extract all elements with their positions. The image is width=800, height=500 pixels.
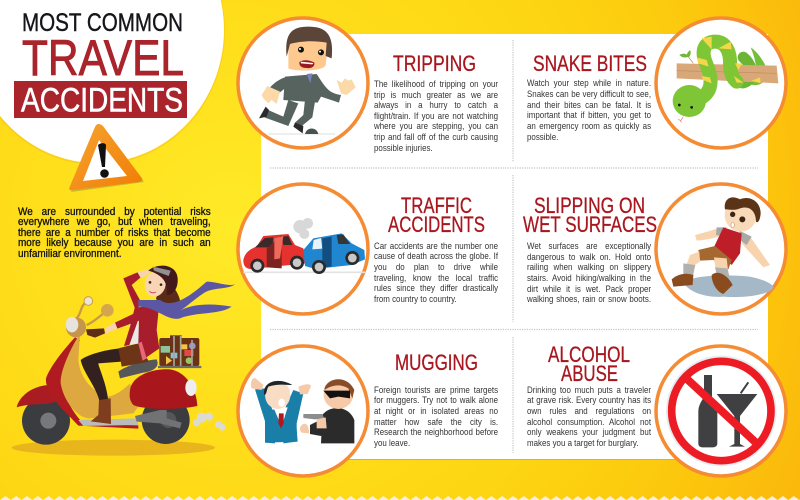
body: slipping on wet surfaces: walking shoes, rain or snow boots. xyxy=(527,294,651,305)
body: mugging: for muggers. Try not to walk alone xyxy=(374,395,498,406)
body: tripping: trip and fall off of the curb causing xyxy=(374,132,498,143)
body: slipping on wet surfaces: dirt while it is wet. Pack proper xyxy=(527,284,651,295)
heading: mugging: MUGGING xyxy=(395,350,478,375)
heading: alcohol abuse xyxy=(548,342,630,386)
body: alcohol abuse: Drinking too much puts a traveler xyxy=(527,385,651,396)
panel: traffic accidents xyxy=(238,184,498,314)
body: snake bites: possible. xyxy=(527,132,558,143)
heading: slipping on wet surfaces: WET SURFACES xyxy=(523,212,657,237)
icon: crashed cars xyxy=(238,184,368,314)
heading: slipping on wet surfaces: SLIPPING ON xyxy=(534,193,645,218)
body: alcohol abuse: only weakens your judgment but xyxy=(527,427,651,438)
intro text: We are surrounded by potential risks xyxy=(18,206,211,218)
body: tripping: possible injuries. xyxy=(374,143,433,154)
intro text xyxy=(18,206,211,260)
body: mugging xyxy=(374,384,498,449)
body: tripping: flight/train. If you are not watching xyxy=(374,111,498,122)
exhaust smoke xyxy=(193,413,226,431)
heading: snake bites: SNAKE BITES xyxy=(533,51,647,76)
body: traffic accidents: from country to country. xyxy=(374,294,457,305)
suitcase xyxy=(158,335,201,367)
body: tripping: where you are stepping, you can xyxy=(374,121,498,132)
body: mugging: you leave. xyxy=(374,438,410,449)
icon: warning triangle xyxy=(69,124,144,192)
body: slipping on wet surfaces: dangerous to walk on. Hold onto xyxy=(527,252,651,263)
title line: travel: TRAVEL xyxy=(22,30,184,86)
heading: alcohol abuse: ALCOHOL xyxy=(548,342,630,367)
body: slipping on wet surfaces: railing when walking on slippery xyxy=(527,262,651,273)
body: traffic accidents: cause of death across the globe. If xyxy=(374,251,498,262)
body: mugging: matter how safe the city is. xyxy=(374,417,498,428)
intro text: there are a number of risks that become xyxy=(18,227,211,239)
heading: alcohol abuse: ABUSE xyxy=(561,361,618,386)
body: tripping xyxy=(374,78,498,153)
intro text: unfamiliar environment. xyxy=(18,248,122,260)
body: tripping: The likelihood of tripping on your xyxy=(374,79,498,90)
icon: no alcohol sign xyxy=(656,346,786,476)
body: slipping on wet surfaces: stairs. Avoid hiking/walking in the xyxy=(527,273,651,284)
rider xyxy=(81,266,235,424)
body: snake bites: and their bites can be fatal. It is xyxy=(527,100,651,111)
body: alcohol abuse: at grave risk. Every country has its xyxy=(527,395,651,406)
panel: mugging xyxy=(238,346,498,476)
intro text: more likely because you are in such an xyxy=(18,237,211,249)
heading: traffic accidents: TRAFFIC xyxy=(401,193,472,218)
heading: tripping: TRIPPING xyxy=(393,51,476,76)
body: snake bites: Watch your step while in nature. xyxy=(527,78,651,89)
body: tripping: trip is much greater as we are xyxy=(374,90,498,100)
body: alcohol abuse xyxy=(527,384,651,449)
icon: mugger and victim xyxy=(238,346,368,476)
title line: most common: MOST COMMON xyxy=(22,9,183,37)
body: traffic accidents: Car accidents are the number one xyxy=(374,241,498,252)
heading: slipping on wet surfaces xyxy=(523,193,657,237)
rear wheel xyxy=(142,396,190,444)
illustration: woman on scooter xyxy=(12,266,235,456)
body: tripping: always in a hurry to catch a xyxy=(374,100,498,111)
scooter body xyxy=(17,333,197,429)
icon: tripping man xyxy=(238,18,368,148)
heading: traffic accidents: ACCIDENTS xyxy=(388,212,485,237)
heading: traffic accidents xyxy=(388,193,485,237)
body: snake bites: an emergency room as quickly as xyxy=(527,121,651,132)
zigzag bottom edge xyxy=(0,496,800,500)
panel: snake bites xyxy=(527,18,786,148)
icon: snake on branch xyxy=(656,18,786,148)
title banner: accidents: ACCIDENTS xyxy=(21,82,183,120)
body: traffic accidents xyxy=(374,240,498,305)
title white circle xyxy=(0,0,224,163)
title block xyxy=(0,0,225,165)
body: snake bites xyxy=(527,78,651,143)
panel: alcohol abuse xyxy=(527,342,786,476)
body: snake bites: Snakes can be very difficult to see, xyxy=(527,89,651,100)
body: traffic accidents: traveling, know the local traffic xyxy=(374,273,498,284)
front wheel xyxy=(22,397,70,445)
body: alcohol abuse: makes you a target for burglary. xyxy=(527,438,638,449)
body: snake bites: important that if bitten, you get to xyxy=(527,110,651,121)
panel: tripping xyxy=(238,18,498,153)
title circle shadow xyxy=(0,0,225,165)
icon: slipping boy xyxy=(656,184,786,314)
white content panel xyxy=(261,34,768,460)
body: traffic accidents: rules since they differ drastically xyxy=(374,283,498,294)
intro text: everywhere we go, but when traveling, xyxy=(18,216,211,228)
panel: slipping on wet surfaces xyxy=(523,184,786,314)
body: slipping on wet surfaces: Wet surfaces are exceptionally xyxy=(527,241,651,252)
body: mugging: Foreign tourists are prime targets xyxy=(374,385,498,396)
scooter shadow xyxy=(12,440,215,456)
body: slipping on wet surfaces xyxy=(527,241,651,306)
body: traffic accidents: you do plan to drive while xyxy=(374,262,498,273)
body: alcohol abuse: alcohol consumption. Alcohol not xyxy=(527,417,651,428)
body: alcohol abuse: own rules and regulations on xyxy=(527,406,651,417)
handlebars and headlight xyxy=(66,297,114,337)
body: mugging: at night or in isolated areas no xyxy=(374,406,498,417)
body: mugging: Research the neighborhood before xyxy=(374,427,498,438)
